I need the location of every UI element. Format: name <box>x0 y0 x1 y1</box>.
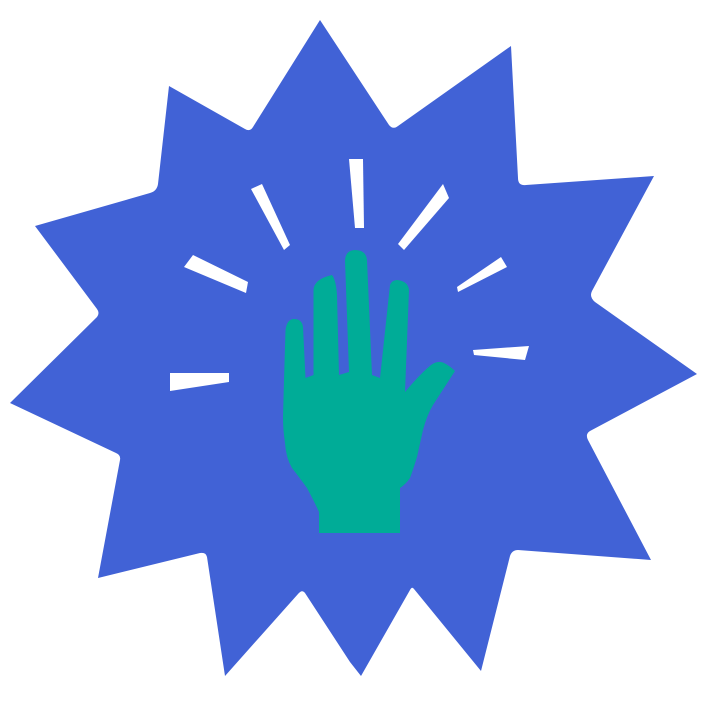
ray: right <box>457 257 507 292</box>
icon: raised hand <box>283 250 455 533</box>
rays <box>170 159 529 391</box>
ray: lower right <box>473 346 529 360</box>
ray: lower left <box>170 373 229 391</box>
ray: upper left <box>251 184 290 250</box>
ray: upper right <box>398 184 449 250</box>
ray: left <box>184 255 248 293</box>
ray: top <box>349 159 364 228</box>
